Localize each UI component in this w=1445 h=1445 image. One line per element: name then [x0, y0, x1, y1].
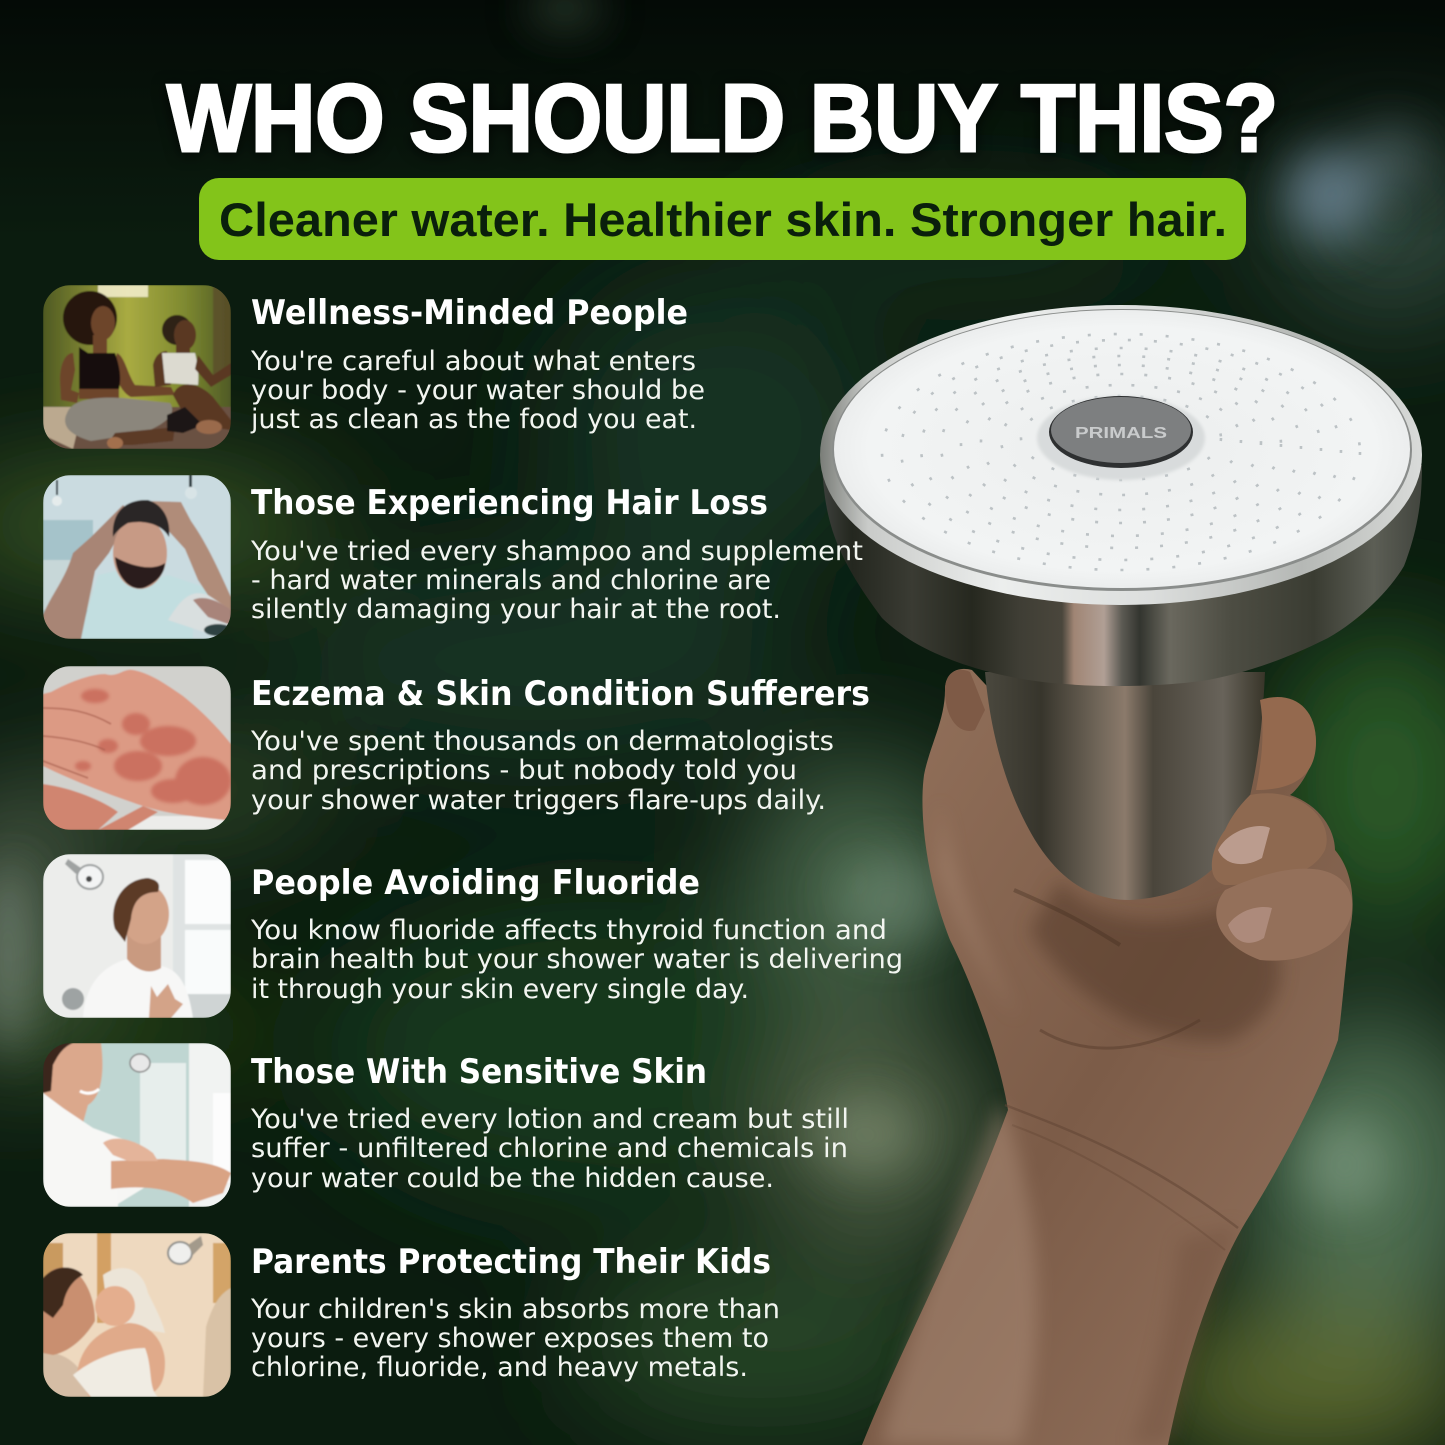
item 2: hair loss: You've tried every shampoo and supplement [250, 536, 863, 567]
item 6: parents: chlorine, fluoride, and heavy metals. [251, 1352, 748, 1383]
shower head metal rim [820, 305, 1422, 605]
item 6: parents: Parents Protecting Their Kids [251, 1242, 771, 1282]
item 2: hair loss: silently damaging your hair at the root. [251, 594, 781, 625]
item 5: sensitive skin: suffer - unfiltered chlorine and chemicals in [251, 1133, 848, 1164]
photo: wellness couple meditating [43, 285, 231, 449]
subtitle banner [199, 178, 1246, 260]
item 6: parents: Your children's skin absorbs more than [250, 1294, 780, 1325]
item 3: eczema: Eczema & Skin Condition Sufferers [251, 674, 870, 714]
photo: woman with sensitive skin [43, 1043, 231, 1207]
item 3: eczema [250, 674, 870, 816]
item 4: fluoride [250, 863, 903, 1005]
item 1: wellness-minded people: just as clean as the food you eat. [250, 404, 697, 435]
item 5: sensitive skin [250, 1052, 849, 1194]
item 4: fluoride: You know fluoride affects thyroid function and [250, 915, 887, 946]
item 4: fluoride: it through your skin every single day. [251, 974, 749, 1005]
photo: man avoiding fluoride [43, 854, 231, 1018]
item 2: hair loss [250, 483, 863, 625]
man [162, 315, 192, 345]
item 3: eczema: You've spent thousands on dermatologists [250, 726, 834, 757]
shower head side wall [822, 465, 1422, 686]
item 1: wellness-minded people: You're careful about what enters [250, 346, 696, 377]
item 4: fluoride: brain health but your shower water is delivering [251, 944, 903, 975]
item 6: parents: yours - every shower exposes them to [251, 1323, 769, 1354]
title: WHO SHOULD BUY THIS? [167, 65, 1278, 172]
photo: parent with baby [43, 1233, 231, 1397]
item 5: sensitive skin: your water could be the hidden cause. [251, 1163, 774, 1194]
item 4: fluoride: People Avoiding Fluoride [251, 863, 700, 903]
item 2: hair loss: - hard water minerals and chlorine are [251, 565, 771, 596]
item 5: sensitive skin: Those With Sensitive Skin [251, 1052, 707, 1092]
woman [63, 291, 117, 345]
item 2: hair loss: Those Experiencing Hair Loss [251, 483, 768, 523]
item 1: wellness-minded people: Wellness-Minded People [251, 293, 688, 333]
cylinder body [985, 672, 1265, 900]
item 1: wellness-minded people: your body - your water should be [251, 375, 705, 406]
item 5: sensitive skin: You've tried every lotion and cream but still [250, 1104, 849, 1135]
item 3: eczema: and prescriptions - but nobody told you [251, 755, 797, 786]
logo badge: PRIMALS [1075, 425, 1167, 442]
shower head white face [832, 309, 1412, 591]
photo: man with hair loss [43, 475, 232, 639]
item 1: wellness-minded people [250, 293, 705, 435]
logo badge [1037, 396, 1205, 480]
fingers [945, 670, 1352, 961]
photo: hand holding product [820, 305, 1422, 1445]
photo: eczema hands [43, 666, 231, 830]
subtitle banner: Cleaner water. Healthier skin. Stronger hair. [219, 193, 1227, 246]
spray holes [882, 334, 1360, 570]
item 6: parents [250, 1242, 780, 1383]
item 3: eczema: your shower water triggers flare-ups daily. [251, 785, 826, 816]
